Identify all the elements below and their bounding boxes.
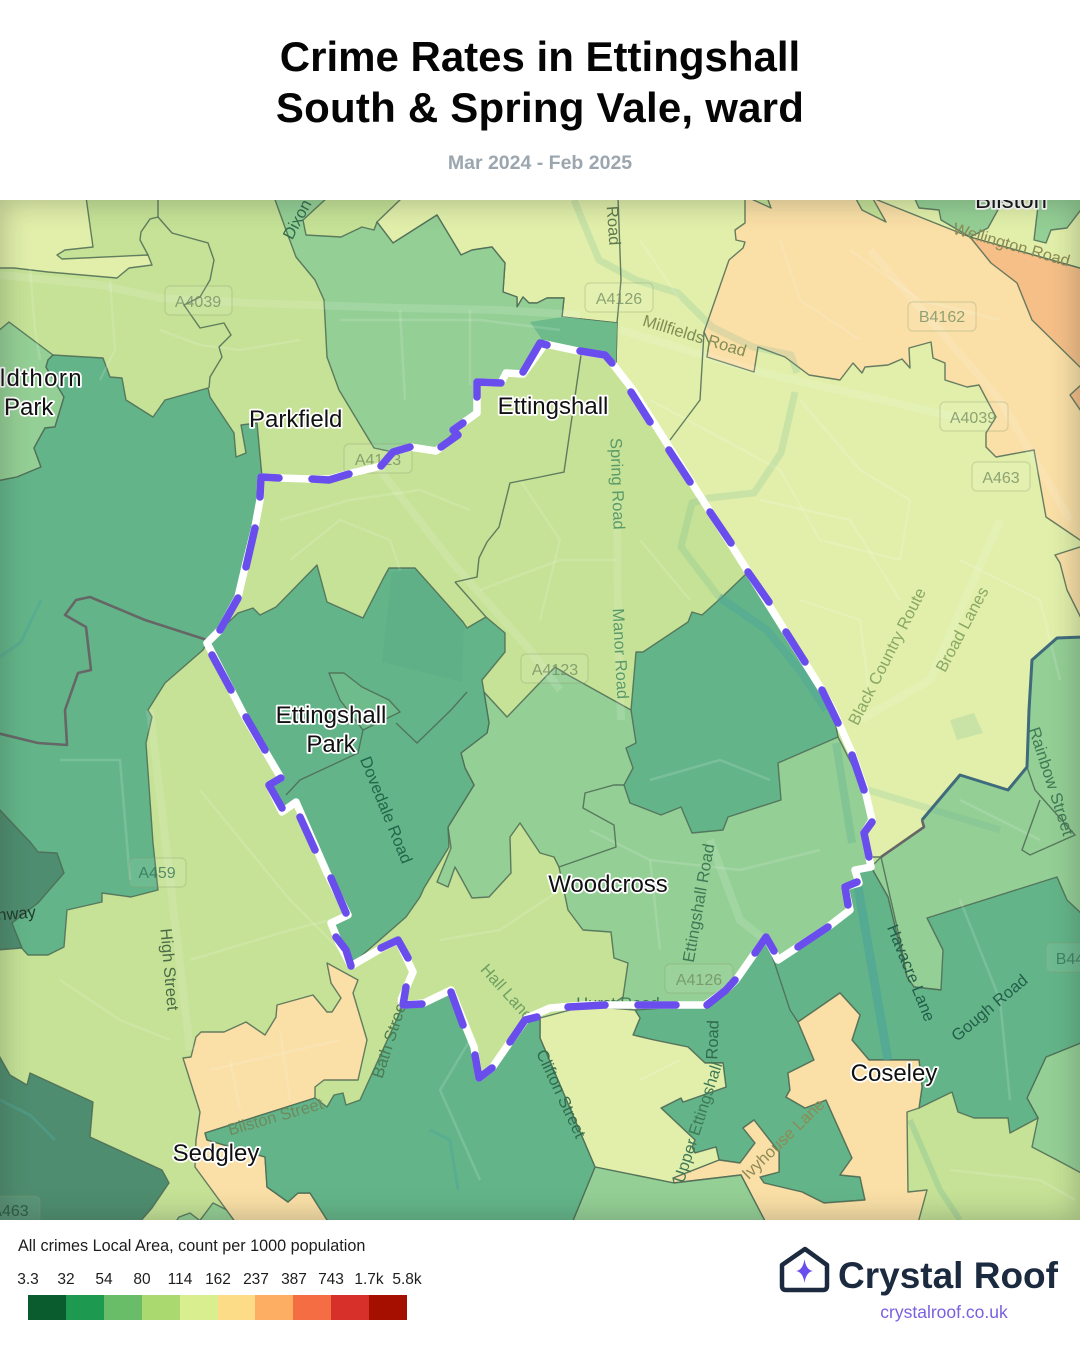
legend: 387 bbox=[281, 1271, 307, 1288]
ward boundary: white line bbox=[207, 344, 872, 1078]
road names: Spring Road bbox=[606, 438, 628, 530]
road names: Havacre Lane bbox=[883, 922, 938, 1024]
faint minor streets bbox=[30, 240, 1075, 1200]
place names: Ettingshall bbox=[498, 393, 608, 420]
panel: choropleth map bbox=[0, 200, 1080, 1220]
legend bbox=[17, 1237, 422, 1320]
choropleth regions bbox=[0, 197, 1080, 1223]
road names: Dovedale Road bbox=[356, 754, 415, 866]
road names: Road bbox=[703, 1020, 723, 1060]
title: South & Spring Vale, ward bbox=[276, 84, 804, 131]
place names: Parkfield bbox=[249, 406, 342, 433]
river and district boundaries bbox=[0, 597, 1080, 857]
icon: house with star bbox=[780, 1246, 830, 1292]
place names: Woodcross bbox=[548, 871, 668, 898]
legend colour scale bbox=[28, 1295, 407, 1320]
road names: Clifton Street bbox=[532, 1047, 589, 1141]
road names: Ettingshall Road bbox=[680, 842, 718, 964]
road shields: A4126 bbox=[676, 972, 722, 989]
legend: 32 bbox=[57, 1271, 75, 1288]
road names: Road bbox=[603, 205, 623, 246]
road shields: A4039 bbox=[175, 294, 221, 311]
road names: High Street bbox=[156, 928, 182, 1012]
logo: Crystal Roof bbox=[780, 1246, 1058, 1322]
legend: 237 bbox=[243, 1271, 269, 1288]
road shields bbox=[0, 283, 1080, 1226]
road names: Millfields Road bbox=[641, 312, 748, 361]
title: Crime Rates in Ettingshall bbox=[280, 33, 800, 80]
legend: 3.3 bbox=[17, 1271, 39, 1288]
road shields: A459 bbox=[138, 865, 176, 882]
road names bbox=[0, 197, 1077, 1185]
road shields: A463 bbox=[982, 470, 1020, 487]
road shields: A4123 bbox=[532, 662, 578, 679]
place names: Ettingshall bbox=[276, 702, 386, 729]
legend: 1.7k bbox=[354, 1271, 384, 1288]
place names: Sedgley bbox=[173, 1140, 259, 1167]
road names: Hall Lane bbox=[477, 961, 537, 1025]
road shields: A4039 bbox=[950, 410, 996, 427]
legend: 743 bbox=[318, 1271, 344, 1288]
legend: 114 bbox=[168, 1271, 192, 1288]
main roads bbox=[0, 250, 1070, 1050]
road names: Wellington Road bbox=[951, 220, 1072, 270]
ward boundary: purple dashes bbox=[212, 343, 872, 1078]
legend: 162 bbox=[205, 1271, 231, 1288]
road names: Gough Road bbox=[948, 971, 1031, 1045]
road names: Rainbow Street bbox=[1025, 725, 1077, 838]
place names: Coseley bbox=[851, 1060, 937, 1087]
road names: Hurst Road bbox=[576, 995, 660, 1013]
logo wordmark: Crystal Roof bbox=[838, 1255, 1058, 1296]
place names: Park bbox=[4, 394, 54, 421]
legend heading: All crimes Local Area, count per 1000 population bbox=[18, 1237, 365, 1255]
road names: Bath Street bbox=[369, 996, 412, 1080]
website url: crystalroof.co.uk bbox=[880, 1302, 1008, 1322]
place names bbox=[0, 187, 1047, 1167]
canal bbox=[0, 200, 1000, 1220]
legend: 54 bbox=[95, 1271, 113, 1288]
inner boundary lines bbox=[140, 197, 1075, 1022]
pond bbox=[950, 713, 983, 740]
title bbox=[276, 33, 804, 131]
road names: Bilston Street bbox=[226, 1095, 326, 1139]
legend tick labels bbox=[17, 1271, 422, 1288]
road names: Broad Lanes bbox=[933, 584, 992, 675]
road shields: A4126 bbox=[596, 291, 642, 308]
road names: Black Country Route bbox=[845, 585, 930, 728]
legend: 80 bbox=[133, 1271, 151, 1288]
road shields: A4123 bbox=[355, 452, 401, 469]
place names: Park bbox=[306, 731, 357, 758]
road names: Ivyhouse Lane bbox=[739, 1096, 828, 1183]
road names: Upper Ettingshall bbox=[670, 1060, 726, 1185]
road names: Manor Road bbox=[609, 608, 631, 700]
road shields: B4162 bbox=[919, 309, 965, 326]
date range subtitle: Mar 2024 - Feb 2025 bbox=[448, 152, 632, 174]
legend: 5.8k bbox=[392, 1271, 422, 1288]
